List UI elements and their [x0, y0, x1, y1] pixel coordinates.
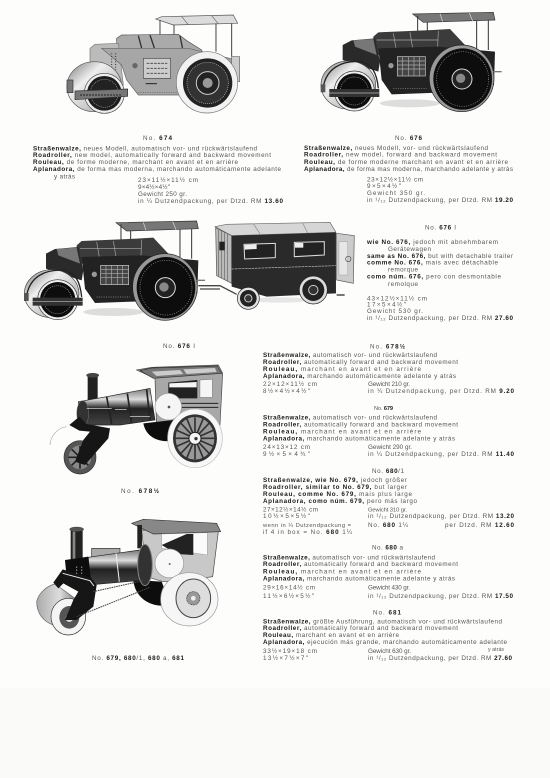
description: No. 678½: 8½×4½×4½": [263, 387, 310, 395]
caption and description: No. 676 I: remorque: [388, 266, 418, 274]
caption and description: No. 676: Aplanadora, de forma mas moderna, marchando adelante y atrás: [304, 166, 513, 173]
caption and description: No. 676: Rouleau, de forme moderne marchant en avant et en arrière: [304, 159, 508, 166]
caption: No. 679, 680/1, 680 a, 681 illustration: No. 679, 680/1, 680 a, 681: [92, 655, 184, 662]
caption and description: No. 674: [33, 135, 283, 205]
caption and description: No. 676 I: remolque: [388, 281, 418, 288]
illustration: road roller No. 676: [321, 12, 502, 112]
illustration: road roller No. 679 / 680 / 681: [37, 519, 221, 635]
description: No. 680 a: Roadroller, automatically forward and backward movement: [263, 561, 458, 568]
caption and description: No. 674: Roadroller, new model, automatically forward and backward movement: [33, 152, 271, 159]
caption and description: No. 676: [304, 135, 513, 204]
description: No. 680/1: wenn in ¼ Dutzendpackung =: [262, 523, 352, 529]
description: No. 679: Straßenwalze, automatisch vor- und rückwärtslaufend: [263, 414, 437, 422]
caption and description: No. 674: Straßenwalze, neues Modell, automatisch vor- und rückwärtslaufend: [33, 146, 257, 152]
description: No. 681: y atrás: [488, 647, 504, 653]
description: No. 678½: Aplanadora, marchando automáticamente adelante y atrás: [263, 373, 456, 380]
caption and description: No. 674: y atrás: [54, 174, 75, 180]
caption and description: No. 676 I: 17×5×4½": [367, 300, 406, 308]
description: No. 681: Aplanadora, ejecución más grande, marchando automáticamente adelante: [263, 639, 507, 646]
description: No. 679: Roadroller, automatically forward and backward movement: [263, 422, 458, 428]
description: No. 678½: in ¼ Dutzendpackung, per Dtzd. RM 9.20: [368, 388, 514, 395]
description: No. 681: in ¹/₁₂ Dutzendpackung, per Dtzd. RM 27.60: [368, 655, 512, 662]
caption and description: No. 674: in ¼ Dutzendpackung, per Dtzd. RM 13.60: [138, 198, 283, 205]
caption and description: No. 676 I: same as No. 676, but with detachable trailer: [367, 253, 513, 260]
description: No. 679: [263, 406, 514, 458]
description: No. 678½: 22×12×11½ cm: [263, 380, 317, 388]
description: No. 680/1: No. 680/1: [372, 468, 404, 475]
caption and description: No. 676 I: wie No. 676, jedoch mit abnehmbarem: [366, 239, 498, 246]
illustration: road roller No. 676 I with trailer: [24, 221, 354, 320]
description: No. 679: Gewicht 290 gr.: [368, 444, 412, 451]
description: No. 678½: [263, 342, 514, 395]
description: No. 679: Aplanadora, marchando automáticamente adelante y atrás: [263, 436, 455, 442]
caption and description: No. 676 I: [366, 224, 513, 322]
caption and description: No. 676: in ¹/₁₂ Dutzendpackung, per Dtzd. RM 19.20: [367, 197, 513, 204]
caption and description: No. 674: 23×11½×11½ cm: [138, 176, 198, 184]
caption and description: No. 676: Gewicht 350 gr.: [367, 190, 425, 197]
description: No. 679: in ¼ Dutzendpackung, per Dtzd. RM 11.40: [368, 451, 514, 458]
description: No. 680 a: Straßenwalze, automatisch vor- und rückwärtslaufend: [263, 554, 435, 562]
illustration: road roller No. 674: [67, 15, 240, 113]
caption and description: No. 676 I: No. 676 I: [425, 224, 456, 232]
description: No. 680 a: No. 680 a: [372, 544, 403, 552]
caption: No. 676 I illustration: No. 676 I: [163, 343, 195, 350]
caption: No. 678½ illustration: No. 678½: [121, 487, 159, 495]
paper fold line: [0, 688, 550, 778]
description: No. 678½: Rouleau, marchant en avant et en arrière: [263, 366, 421, 373]
caption and description: No. 676 I: Gewicht 530 gr.: [367, 308, 423, 315]
description: No. 680/1: 27×12½×14½ cm: [263, 506, 318, 514]
description: No. 680/1: per Dtzd. RM 12.60: [445, 522, 514, 529]
description: No. 680 a: [263, 544, 513, 600]
description: No. 680/1: Aplanadora, como núm. 679, pero más largo: [263, 498, 417, 505]
caption and description: No. 674: Gewicht 250 gr.: [138, 191, 187, 198]
caption and description: No. 676: 9×5×4½": [367, 182, 401, 190]
description: No. 680/1: if 4 in box = No. 680 1¼: [263, 529, 353, 536]
description: No. 680/1: 10½×5×5½": [263, 512, 310, 520]
caption and description: No. 676 I: in ¹/₁₂ Dutzendpackung, per Dtzd. RM 27.60: [367, 315, 513, 322]
description: No. 680/1: Straßenwalze, wie No. 679, jedoch größer: [263, 477, 407, 484]
caption and description: No. 676: Roadroller, new model, forward and backward movement: [304, 152, 497, 159]
description: No. 678½: Gewicht 210 gr.: [368, 381, 410, 388]
caption and description: No. 674: Rouleau, de forme moderne, marchant en avant et en arrière: [33, 159, 238, 166]
description: No. 680/1: Rouleau, comme No. 679, mais plus large: [263, 491, 412, 498]
description: No. 680 a: Rouleau, marchant en avant et en arrière: [263, 568, 421, 576]
description: No. 680 a: Aplanadora, marchando automáticamente adelante y atrás: [263, 576, 455, 582]
description: No. 678½: Straßenwalze, automatisch vor- und rückwärtslaufend: [263, 352, 437, 359]
description: No. 681: No. 681: [373, 610, 401, 616]
description: No. 679: 24×13×12 cm: [263, 444, 310, 451]
caption and description: No. 676: 23×12½×11½ cm: [367, 176, 423, 184]
caption and description: No. 676 I: 43×12½×11½ cm: [367, 294, 427, 302]
caption and description: No. 676 I: como núm. 676, pero con desmontable: [367, 274, 501, 280]
caption and description: No. 676 I: comme No. 676, mais avec détachable: [367, 260, 498, 266]
description: No. 679: No. 679: [374, 406, 393, 412]
illustration: road roller No. 678½: [50, 365, 223, 474]
caption and description: No. 674: 9×4½×4½": [138, 183, 170, 191]
description: No. 680/1: Gewicht 310 gr.: [368, 508, 407, 514]
description: No. 678½: No. 678½: [370, 342, 405, 350]
description: No. 681: Roadroller, automatically forward and backward movement: [263, 625, 458, 632]
description: No. 680 a: 11½×6½×5½": [263, 592, 314, 600]
caption and description: No. 674: No. 674: [143, 135, 172, 142]
caption and description: No. 676 I: Gerätewagen: [388, 246, 431, 253]
description: No. 680 a: in ¹/₁₂ Dutzendpackung, per Dtzd. RM 17.50: [368, 593, 513, 600]
description: No. 681: [263, 610, 512, 662]
description: No. 680/1: No. 680 1¼: [368, 522, 409, 529]
description: No. 679: Rouleau, marchant en avant et en arrière: [263, 428, 421, 436]
caption and description: No. 676: No. 676: [395, 135, 422, 142]
description: No. 681: 33½×19×18 cm: [263, 647, 317, 655]
caption and description: No. 676: Straßenwalze, neues Modell, vor- und rückwärtslaufend: [304, 145, 488, 152]
description: No. 681: Straßenwalze, größte Ausführung, automatisch vor- und rückwärtslaufend: [263, 618, 502, 626]
description: No. 680/1: in ¹/₁₂ Dutzendpackung, per Dtzd. RM 13.20: [368, 513, 514, 520]
description: No. 678½: Roadroller, automatically forward and backward movement: [263, 359, 458, 366]
description: No. 681: Gewicht 630 gr.: [368, 648, 411, 655]
description: No. 679: 9½×5×4¾": [263, 450, 310, 458]
description: No. 680 a: 29×16×14½ cm: [263, 584, 315, 592]
caption and description: No. 674: Aplanadora, de forma mas moderna, marchando automáticamente adelante: [33, 166, 281, 173]
description: No. 681: Rouleau, marchant en avant et en arrière: [263, 632, 399, 639]
description: No. 681: 13½×7½×7": [263, 654, 308, 662]
description: No. 680/1: [262, 468, 514, 536]
description: No. 680/1: Roadroller, similar to No. 679, but larger: [263, 484, 407, 491]
description: No. 680 a: Gewicht 430 gr.: [368, 584, 410, 592]
